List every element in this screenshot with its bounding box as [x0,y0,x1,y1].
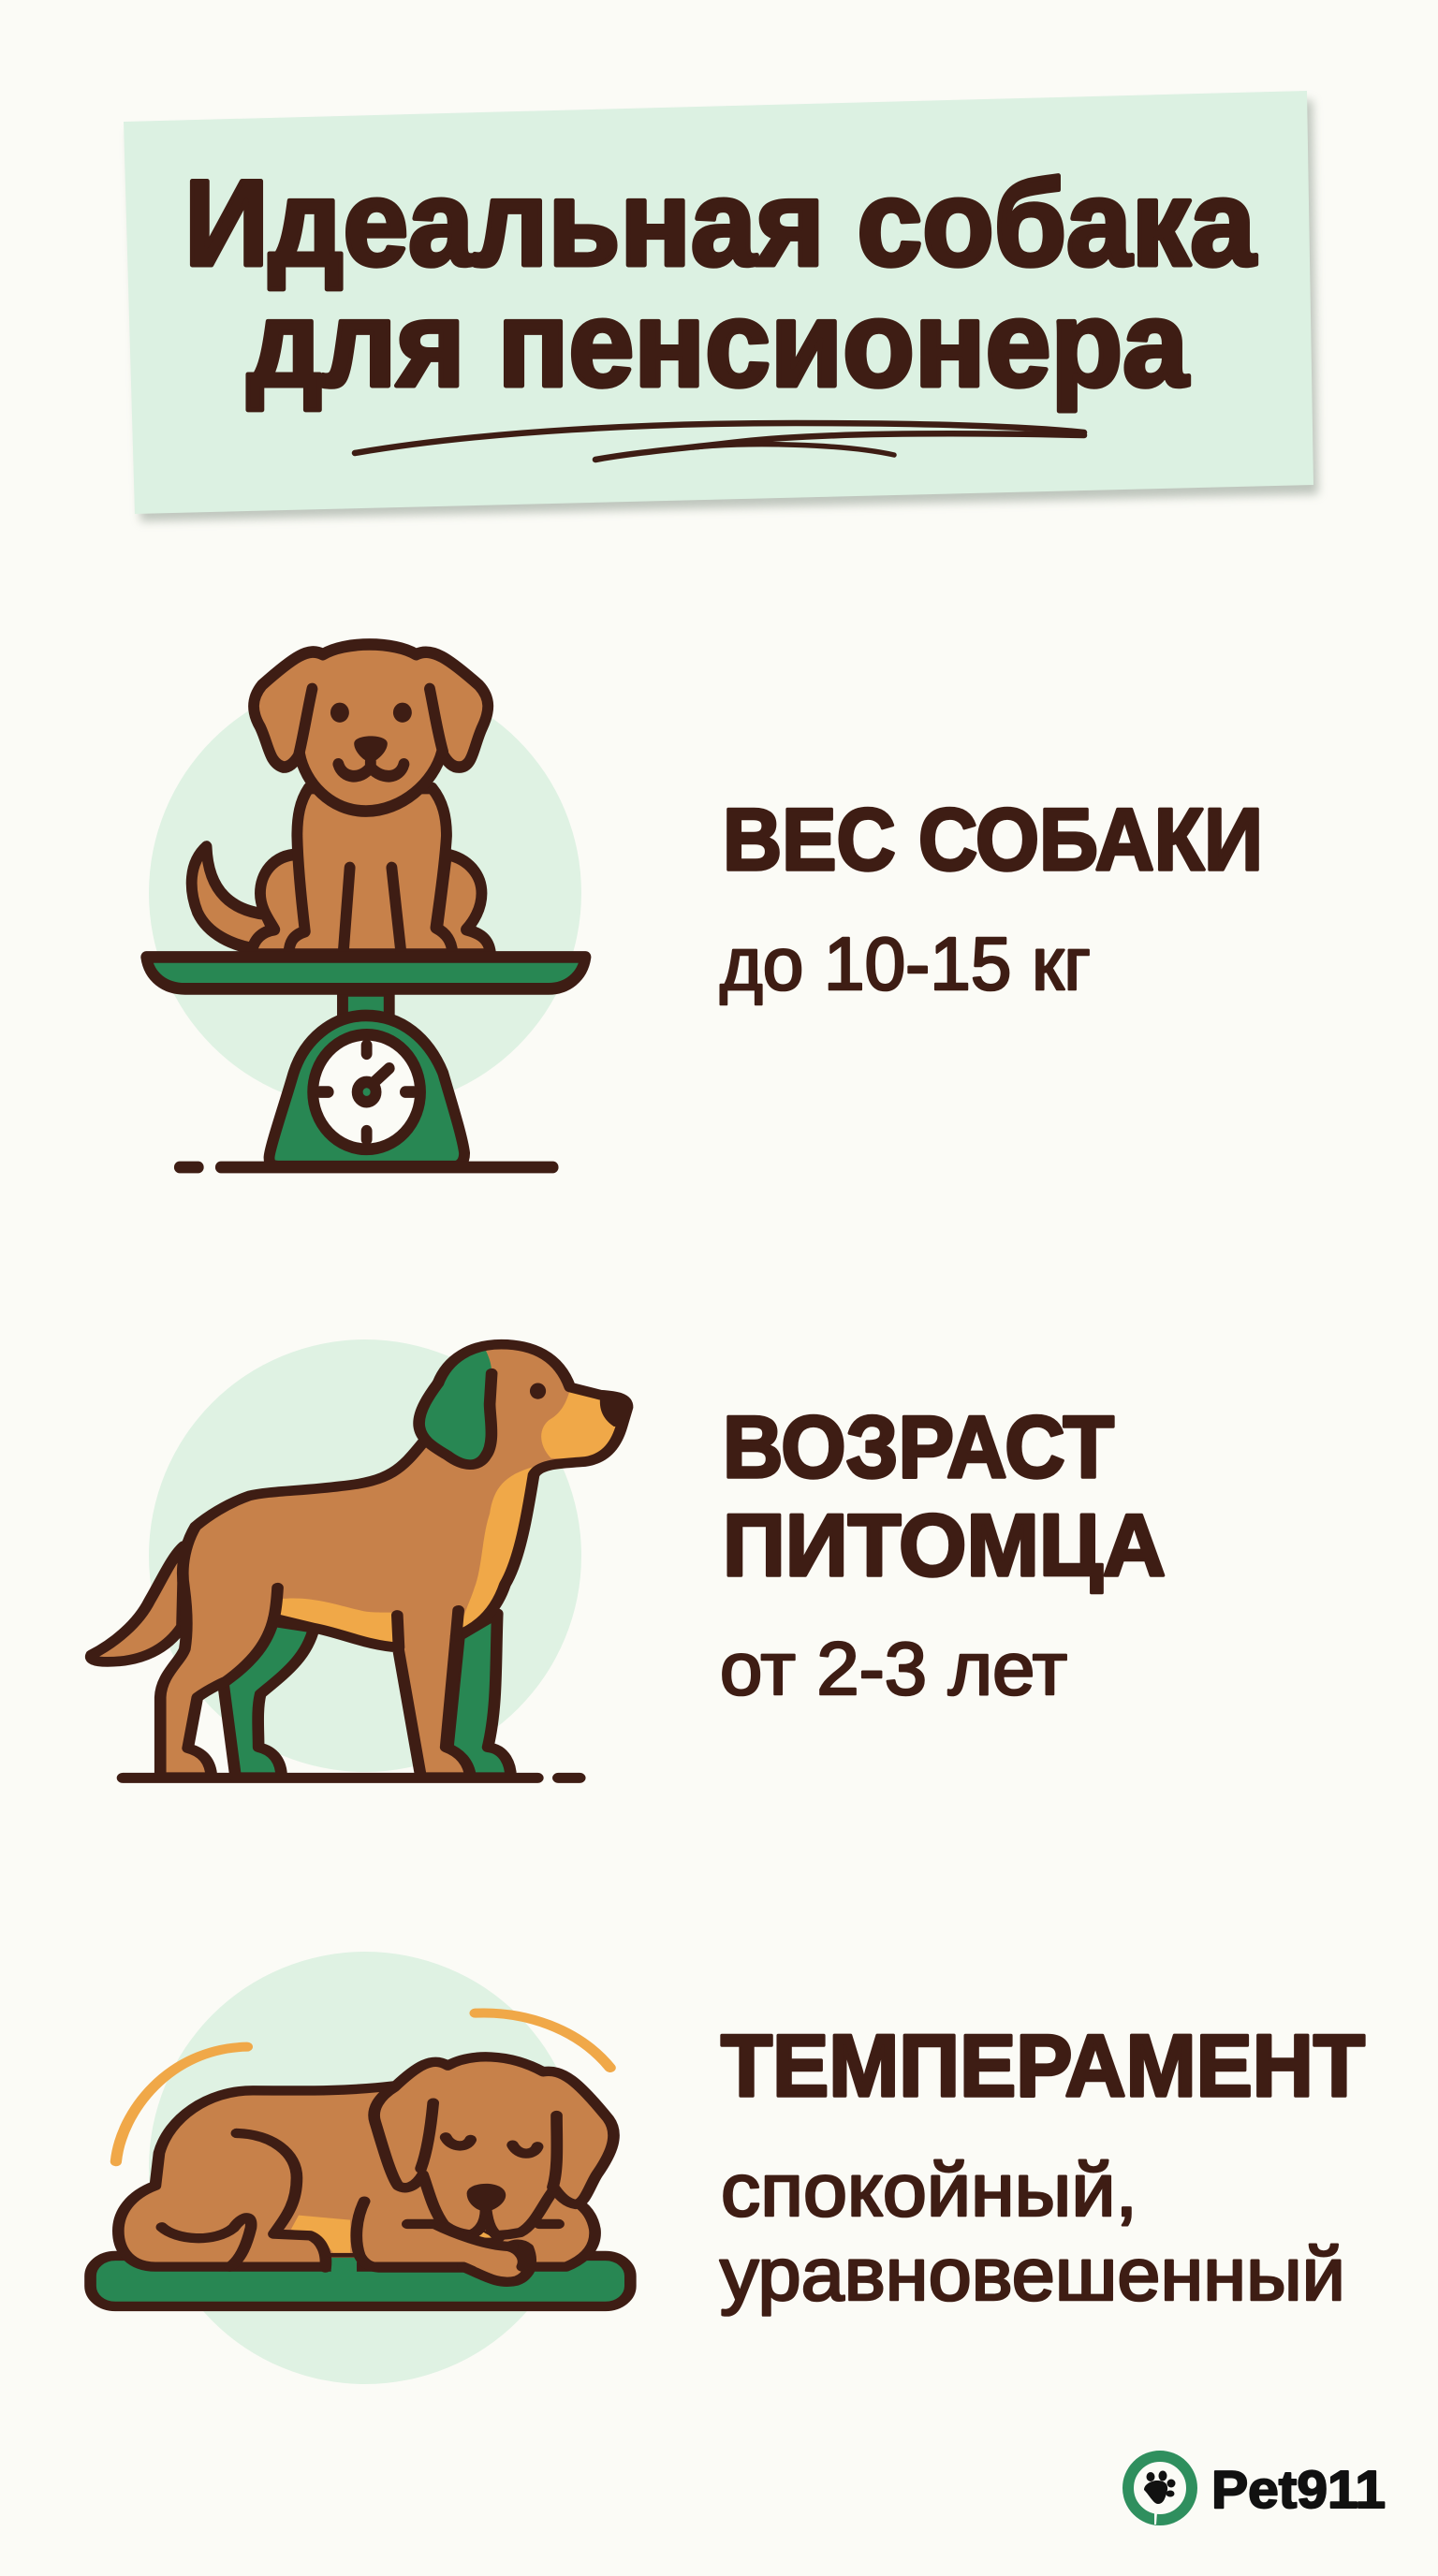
ground line [123,1763,580,1793]
dog body [289,788,452,955]
calm arcs [116,2012,610,2161]
text: age value: от 2-3 лет [720,1627,1067,1710]
logo wordmark: Pet911 [1211,2460,1386,2520]
orange markings [278,1389,620,1646]
body [160,1344,627,1778]
tail [91,1545,184,1661]
underline scribble [355,423,1084,460]
orange belly [291,2216,350,2253]
section: temperament [91,1952,1365,2384]
title: для пенсионера [247,275,1190,412]
mat gap under belly [331,2258,357,2275]
panel: title [124,91,1318,521]
dog tail [192,847,272,949]
dog head [374,2056,614,2238]
body details [162,2133,463,2268]
logo: Pet911 [1128,2456,1386,2525]
heading: age: ВОЗРАСТ [723,1398,1114,1496]
far legs [223,1614,511,1778]
dog outline [160,1344,627,1778]
icon: paw in speech bubble [1128,2456,1192,2525]
dog body [118,2086,595,2281]
mat [91,2256,630,2306]
face [530,1383,629,1427]
title [184,154,1257,412]
title: Идеальная собака [184,154,1257,291]
icon: sleeping dog [91,1952,630,2384]
ear [419,1351,492,1465]
scale base [180,990,553,1167]
text: temperament value: уравновешенный [720,2232,1345,2316]
scale pan [146,957,585,988]
icon: standing dog [91,1339,629,1778]
heading: age: ПИТОМЦА [723,1496,1166,1594]
heading: weight: ВЕС СОБАКИ [723,790,1263,888]
text: weight value: до 10-15 кг [720,922,1091,1005]
text: temperament value: спокойный, [721,2148,1137,2232]
dog haunches [251,855,491,955]
section: dog weight [146,644,1263,1167]
dog head [254,644,488,812]
icon: dog sitting on scale [146,644,585,1167]
heading: temperament: ТЕМПЕРАМЕНТ [721,2016,1365,2115]
section: pet age [91,1339,1166,1778]
front paws [407,2224,559,2282]
